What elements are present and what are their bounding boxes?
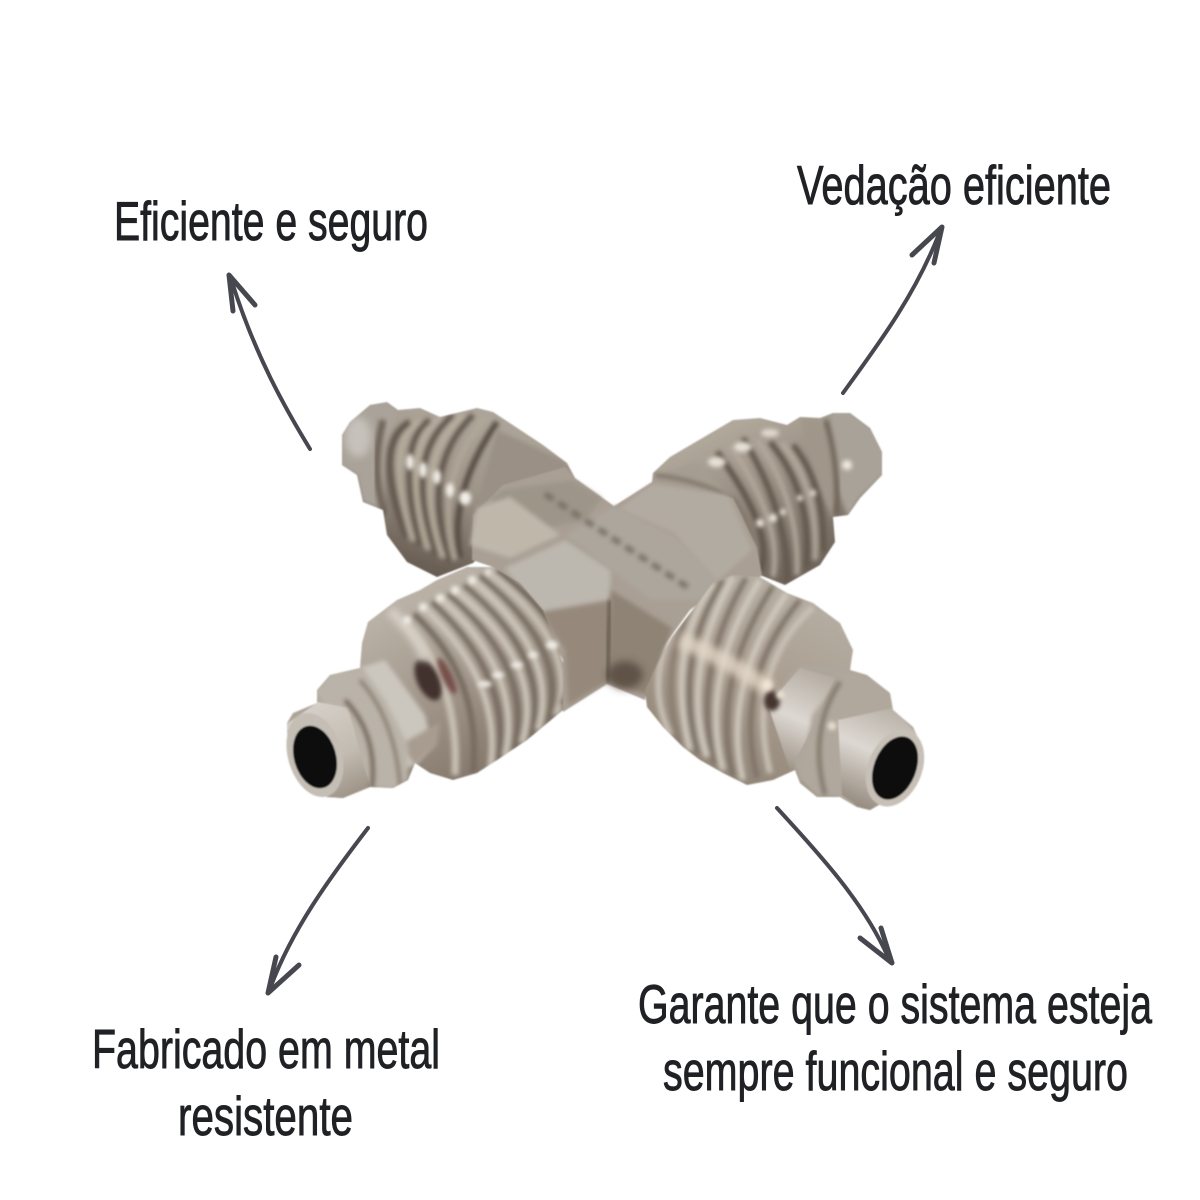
pipe opening: [277, 706, 353, 804]
arrow: up-right: [843, 227, 942, 393]
pipe opening: [855, 721, 935, 815]
back-left arm: [340, 402, 575, 577]
label: Fabricado em metal resistente: Fabricado em metal: [92, 1018, 440, 1080]
product photo: cross fitting: [277, 402, 935, 815]
central body: [470, 467, 762, 712]
stamped marking: [545, 494, 692, 590]
arrow: up-left: [229, 275, 310, 449]
front-left arm: [277, 567, 568, 804]
collar and tube: [360, 660, 432, 770]
label: Fabricado em metal resistente: [92, 1018, 440, 1147]
arrow: down-left: [268, 828, 368, 993]
back-right arm: [650, 410, 885, 585]
front-right arm: [645, 575, 935, 815]
label: Eficiente e seguro: Eficiente e seguro: [114, 190, 428, 252]
collar and tube: [793, 740, 808, 780]
label: Garante que o sistema esteja sempre funcional e seguro: [638, 973, 1152, 1102]
arrow: down-right: [777, 808, 892, 963]
label: Fabricado em metal resistente: resistente: [178, 1085, 353, 1147]
